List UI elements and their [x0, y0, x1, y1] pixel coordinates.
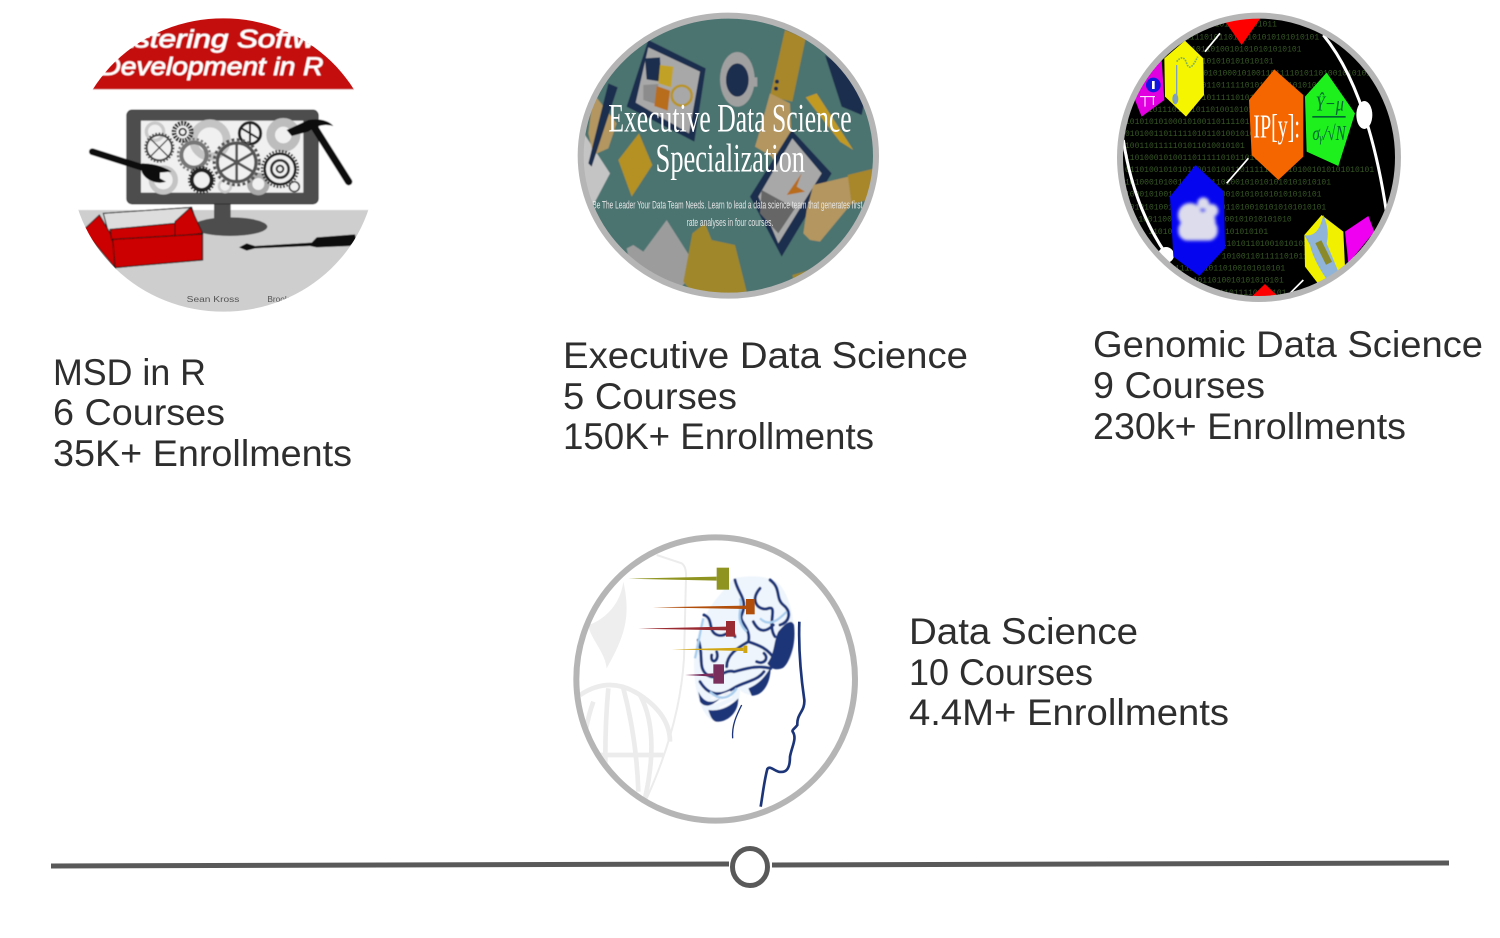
text block: Executive Data Science: Executive Data Science [563, 335, 968, 376]
authors: Sean Kross [187, 294, 239, 304]
monitor [127, 110, 318, 236]
yellow hexagon with note icon [1164, 41, 1204, 117]
binary pattern: 1101001010101010101010101 [1148, 228, 1268, 237]
authors [187, 296, 288, 302]
text block: Executive Data Science: 5 Courses [563, 376, 737, 417]
panel: Mastering Software Development in R badge [78, 18, 368, 312]
binary pattern: 101011010101011 [1205, 21, 1277, 30]
faint flame and globe watermark [580, 555, 686, 805]
binary pattern: 10001010010100101101001010101010101010101 [1125, 191, 1322, 200]
coffee cup [720, 52, 757, 107]
binary pattern: 11010001010011011111010110100 [1125, 154, 1264, 163]
purple pin [685, 664, 724, 684]
magenta hexagon lower [1345, 216, 1374, 263]
ring [581, 16, 876, 296]
text block: Executive Data Science [563, 335, 968, 457]
green pentagon formula [1305, 73, 1355, 166]
text block: Data Science [909, 611, 1229, 733]
binary pattern: 1111011010010101010101 [1178, 277, 1284, 286]
grey desk [78, 210, 368, 312]
orange hexagon IPython: IP[y]: [1253, 108, 1300, 145]
panel: Executive Data Science badge [578, 12, 879, 299]
timeline marker [732, 848, 768, 886]
text block: Genomic Data Science: Genomic Data Science [1093, 324, 1483, 365]
subtitle on image: rate analyses in four courses. [687, 217, 773, 229]
green pentagon formula: σᵧ/√N [1312, 123, 1347, 145]
orange pin [653, 599, 755, 614]
orange hexagon IPython [1249, 69, 1303, 180]
text block: MSD in R: 35K+ Enrollments [53, 433, 352, 474]
text block: Data Science: 4.4M+ Enrollments [909, 692, 1229, 733]
left hand and paper [584, 83, 618, 206]
text block: Data Science: 10 Courses [909, 652, 1093, 693]
timeline [51, 848, 1449, 886]
subtitle on image [592, 199, 862, 229]
yellow pin [672, 646, 747, 653]
red hexagon bottom [1252, 284, 1276, 296]
dark card [825, 55, 868, 115]
yellow hexagon with DNA [1304, 215, 1345, 284]
title on image [609, 104, 851, 180]
banner title [102, 28, 324, 82]
lower tablet [750, 130, 832, 257]
blue hexagon with cloud [1170, 165, 1225, 276]
text block: Executive Data Science: 150K+ Enrollments [563, 416, 874, 457]
title on image: Executive Data Science [608, 96, 852, 141]
ring [576, 537, 855, 821]
gold gear [683, 223, 747, 300]
binary pattern: 1101011010010101010101 [1222, 240, 1327, 249]
white nodes [1158, 101, 1372, 263]
binary pattern: 0110111011110110100101010 [1138, 106, 1258, 115]
small gold corner [792, 270, 808, 278]
white network curves [1123, 33, 1387, 293]
green pentagon formula: Ŷ−μ [1316, 93, 1344, 116]
binary pattern: 11111010110100101010101 [1175, 265, 1285, 274]
wrench head [142, 163, 172, 183]
binary pattern: 011011111010110100101010101 [1202, 82, 1331, 91]
red pin [638, 621, 735, 637]
subtitle on image: Be The Leader Your Data Team Needs. Learn to lead a data science team that generates first [592, 199, 862, 211]
binary pattern: 1110110100101010101010101 [1182, 46, 1302, 55]
text block: Genomic Data Science: 230k+ Enrollments [1093, 406, 1406, 447]
olive pin [628, 568, 729, 590]
magenta hexagon with circuit icon [1135, 60, 1164, 117]
red title banner [92, 18, 354, 90]
right hand and sleeve [803, 168, 875, 242]
authors: Brooke [267, 294, 294, 304]
text block: Genomic Data Science: 9 Courses [1093, 365, 1265, 406]
binary pattern: 0110100101010100010100110111110101101001010101010101 [1125, 166, 1374, 175]
binary pattern: 10100110111110101101 [1222, 252, 1318, 261]
binary pattern: 1011111010101 [1202, 94, 1264, 103]
binary pattern: 01010001010011011110101101001010101 [1203, 70, 1371, 79]
screwdriver [239, 234, 357, 251]
puzzle tablet [627, 40, 706, 142]
text block: MSD in R [53, 352, 352, 474]
text block: Data Science: Data Science [909, 611, 1138, 652]
grey gear [626, 220, 689, 286]
binary pattern: 1111010110100101010101010101 [1185, 33, 1319, 42]
gears on the screen [145, 122, 299, 193]
binary pattern [1125, 21, 1374, 298]
binary pattern: 10011001001010010100101010101010 [1138, 215, 1292, 224]
upper sleeve and hand [755, 30, 806, 177]
text block: MSD in R: MSD in R [53, 352, 206, 393]
panel: Genomic Data Science badge [1117, 12, 1401, 302]
pencil [806, 93, 853, 150]
red hexagon top [1226, 18, 1260, 45]
binary pattern: 1010001010010100101101001010101010101010101 [1125, 178, 1331, 187]
binary pattern: 101010101010101 [1202, 57, 1274, 66]
yellow diamond [618, 133, 652, 197]
banner title: Development in R [101, 54, 324, 81]
binary pattern: 1001101111101011010010101 [1125, 142, 1245, 151]
binary pattern: 10101010100010100110111101 [1125, 118, 1250, 127]
brain [694, 576, 794, 722]
red toolbox [83, 207, 203, 268]
text block: MSD in R: 6 Courses [53, 392, 225, 433]
binary pattern: 010100110111110101101001010 [1125, 130, 1255, 139]
binary pattern: 101010100101011111010110100101010101010101 [1125, 203, 1326, 212]
wrench [92, 152, 145, 168]
brain stem [733, 705, 742, 738]
hammer [287, 119, 349, 182]
title on image: Specialization [656, 136, 805, 181]
panel: Data Science badge [560, 525, 870, 835]
binary pattern: 10011011110101101 [1205, 289, 1287, 298]
face profile [761, 622, 804, 807]
banner title: Mastering Software [91, 27, 361, 54]
text block: Genomic Data Science [1093, 324, 1483, 447]
ring [1120, 16, 1398, 299]
